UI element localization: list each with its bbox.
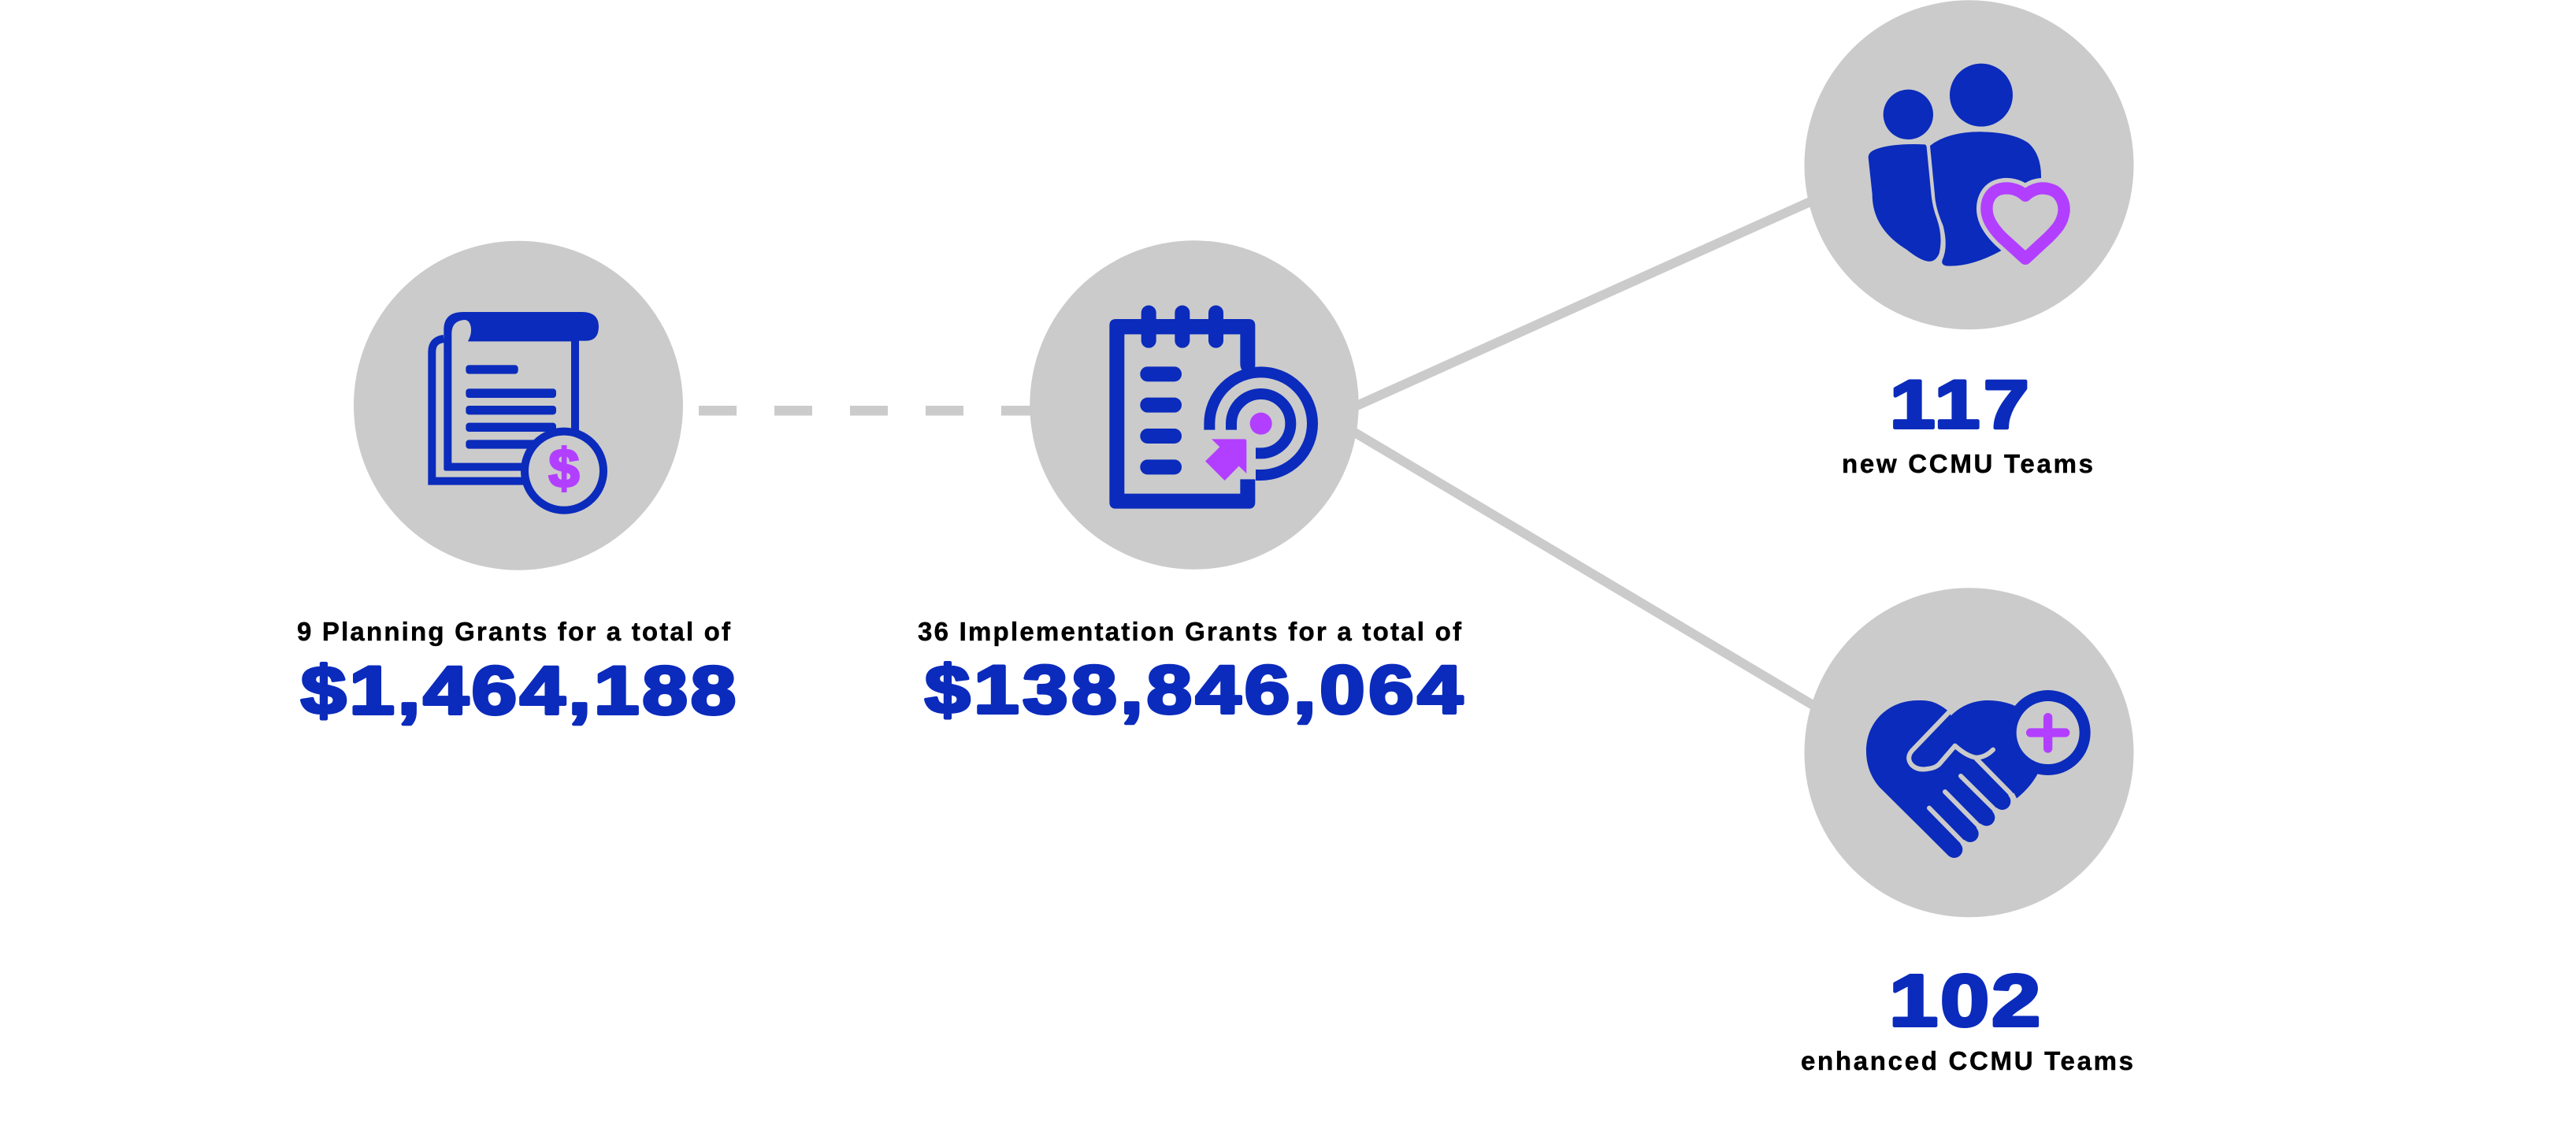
text: planning grants label: 9 Planning Grants for a total of [297,617,731,646]
text: enhanced teams count: 102 [1889,960,2043,1041]
text: new teams label: new CCMU Teams [1842,449,2093,478]
text: implementation grants label: 36 Implementation Grants for a total of [918,617,1462,646]
panel: enhanced teams circle and icon [1804,588,2133,917]
text: new teams count: 117 [1890,367,2033,443]
text: enhanced teams label: enhanced CCMU Teams [1801,1046,2133,1075]
icon: handshake heart with plus [1866,696,2085,856]
panel: implementation grants circle and icon [1030,240,1359,570]
line: implementation to new teams [1355,202,1810,407]
dashed connector: planning to implementation [699,406,1033,416]
icon: document with dollar coin: $ [549,437,579,499]
text: implementation grants amount: $138,846,064 [925,652,1466,728]
panel: planning grants circle and icon [354,241,683,570]
line: implementation to enhanced teams [1353,432,1814,706]
panel: new teams circle and icon [1804,0,2133,329]
icon: notepad with target and arrow [1109,306,1312,509]
icon: two people with heart [1869,64,2064,266]
icon: document with dollar coin [432,312,603,511]
text: planning grants amount: $1,464,188 [301,653,739,729]
